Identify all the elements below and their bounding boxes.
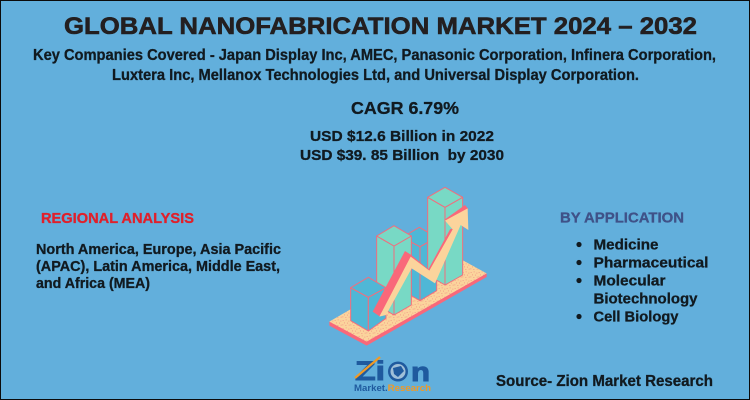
by application heading: BY APPLICATION <box>560 210 684 226</box>
market size figures: USD $39. 85 Billion by 2030 <box>300 147 504 164</box>
bar 4 teal <box>428 187 463 285</box>
bar 1 blue <box>351 277 386 331</box>
icon: isometric bar chart with rising arrow <box>329 187 487 346</box>
list item: molecular biotechnology: Biotechnology <box>594 290 698 308</box>
list item: medicine: Medicine <box>594 236 658 254</box>
list item: pharmaceutical: Pharmaceutical <box>594 254 708 272</box>
regional analysis text: North America, Europe, Asia Pacific <box>36 242 281 258</box>
key companies text: Luxtera Inc, Mellanox Technologies Ltd, and Universal Display Corporation. <box>112 67 639 84</box>
logo swoosh <box>355 357 380 378</box>
logo: Zion Market Research <box>354 356 431 394</box>
list item: cell biology: Cell Biology <box>594 308 679 326</box>
title: GLOBAL NANOFABRICATION MARKET 2024 – 2032 <box>64 13 697 40</box>
regional analysis text: (APAC), Latin America, Middle East, <box>36 259 280 275</box>
regional analysis heading: REGIONAL ANALYSIS <box>41 210 194 227</box>
CAGR figure: CAGR 6.79% <box>351 98 459 118</box>
market size figures <box>300 128 504 164</box>
application list <box>576 236 708 326</box>
rising arrow <box>373 205 468 317</box>
list item: molecular biotechnology: Molecular <box>594 272 666 290</box>
source note: Source- Zion Market Research <box>496 373 713 390</box>
logo globe <box>388 362 408 382</box>
regional analysis text <box>36 242 281 292</box>
logo wordmark: Zi <box>355 356 385 386</box>
key companies text <box>33 47 716 84</box>
logo n: n <box>411 357 430 387</box>
chart platform <box>329 252 487 346</box>
regional analysis text: and Africa (MEA) <box>36 276 150 292</box>
logo tagline: Market.Research <box>354 383 431 394</box>
list item: molecular biotechnology <box>576 272 698 308</box>
market size figures: USD $12.6 Billion in 2022 <box>310 128 494 145</box>
bar 3 blue <box>402 227 437 301</box>
bar 2 teal <box>377 226 411 315</box>
